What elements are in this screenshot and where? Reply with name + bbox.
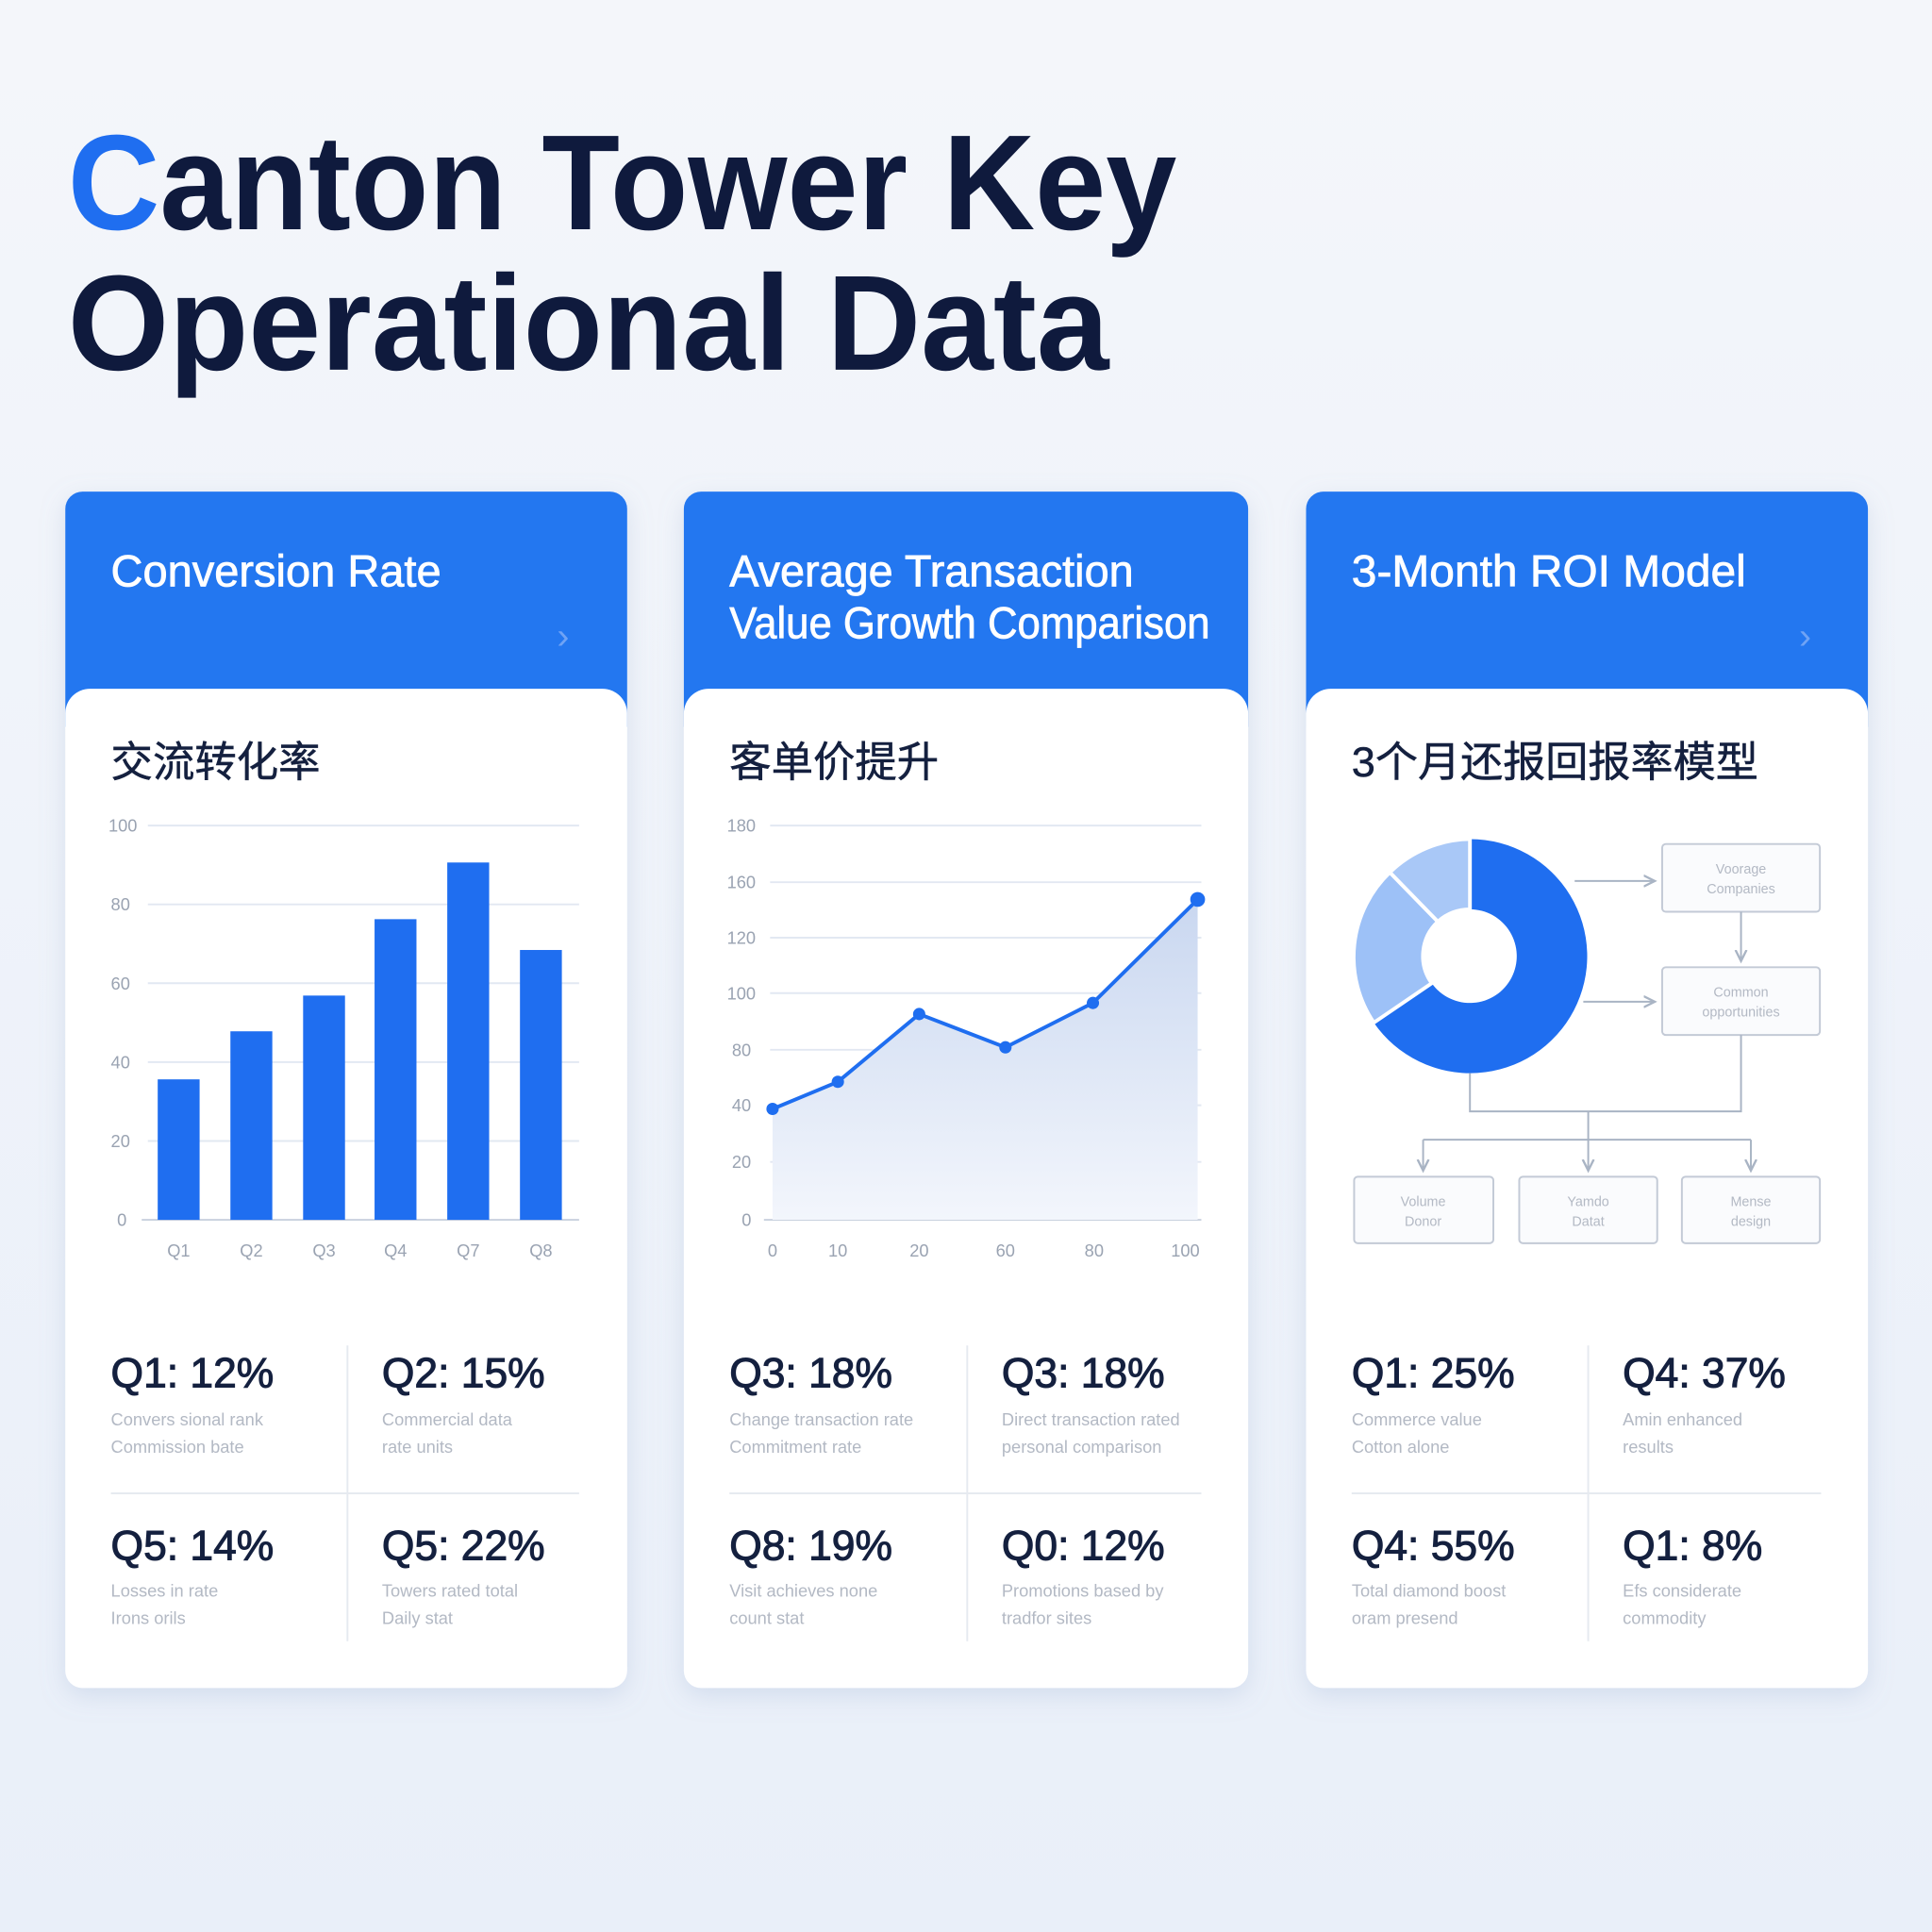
stats: ROI: Q4: 37% [1623,1351,1786,1397]
bar chart [108,816,579,1260]
header: conversion rate: › [557,616,569,657]
flow diagram: design [1731,1215,1771,1230]
stats: ROI [1352,1345,1821,1641]
line chart: 0 [768,1241,777,1260]
stats: ATV: Q8: 19% [729,1524,892,1570]
line chart: 80 [1085,1241,1104,1260]
stats: conversion: Q2: 15% [382,1351,545,1397]
bar chart: 80 [111,894,130,914]
flow diagram: Yamdo [1567,1195,1609,1210]
stats: ROI: Q1: 8% [1623,1524,1762,1570]
line chart [727,816,1205,1260]
line chart: 10 [828,1241,847,1260]
panel: ROI model [1306,491,1868,1688]
header: ROI: 3-Month ROI Model [1352,546,1746,596]
bar chart: Q4 [384,1241,407,1260]
bar chart: 100 [108,816,137,836]
stats: conversion: Losses in rate [111,1581,218,1601]
line chart: 120 [727,927,756,947]
line chart: 40 [732,1095,751,1115]
stats: ATV: Q0: 12% [1002,1524,1165,1570]
title: Canton Tower Key [68,108,1176,258]
bar chart: 0 [117,1210,126,1230]
title [68,108,1176,399]
stats: conversion: Commission bate [111,1437,244,1457]
stats: conversion: Irons orils [111,1607,186,1627]
title: Operational Data [68,248,1110,399]
stats: conversion: Q5: 14% [111,1524,274,1570]
stats: conversion: Q5: 22% [382,1524,545,1570]
stats: conversion: Q1: 12% [111,1351,274,1397]
flow diagram [1354,844,1820,1243]
stats: ROI: Commerce value [1352,1409,1482,1429]
stats: ROI: Total diamond boost [1352,1581,1506,1601]
line chart: 20 [909,1241,929,1260]
stats: conversion: Towers rated total [382,1581,518,1601]
flow diagram: Donor [1405,1215,1441,1230]
line chart: 100 [727,983,756,1003]
stats: ATV: Promotions based by [1002,1581,1164,1601]
bar chart: Q2 [240,1241,263,1260]
stats: ATV: Q3: 18% [729,1351,892,1397]
panel: conversion rate [65,491,627,1688]
stats: ATV: Change transaction rate [729,1409,913,1429]
flow diagram: Volume [1401,1195,1446,1210]
stats: ATV: count stat [729,1607,804,1627]
stats: ATV: Visit achieves none [729,1581,877,1601]
flow diagram: Common [1713,986,1769,1001]
line chart: 0 [741,1210,751,1230]
subtitle: 3个月还报回报率模型 [1352,740,1758,786]
stats: ATV [729,1345,1201,1641]
header: ROI: › [1799,616,1811,657]
bar chart: Q8 [529,1241,553,1260]
line chart: 80 [732,1040,751,1059]
stats: ROI: Q1: 25% [1352,1351,1515,1397]
flow diagram: Datat [1572,1215,1605,1230]
header: conversion rate: Conversion Rate [111,546,441,596]
subtitle: 客单价提升 [729,740,939,786]
stats: ROI: oram presend [1352,1607,1458,1627]
stats: conversion: Daily stat [382,1607,453,1627]
stats: ROI: Cotton alone [1352,1437,1449,1457]
line chart: 20 [732,1152,751,1172]
stats: conversion: rate units [382,1437,453,1457]
subtitle: 交流转化率 [111,740,321,786]
stats: conversion: Convers sional rank [111,1409,264,1429]
stats: ATV: Commitment rate [729,1437,861,1457]
header: ROI [1306,491,1868,727]
flow diagram: Companies [1707,882,1775,897]
header: ATV: Value Growth Comparison [729,598,1210,648]
line chart: 180 [727,816,756,836]
line chart: 60 [996,1241,1015,1260]
donut chart [1354,839,1587,1074]
stats: ATV: Q3: 18% [1002,1351,1165,1397]
header: conversion rate [65,491,627,727]
stats: ATV: tradfor sites [1002,1607,1091,1627]
bar chart: 40 [111,1052,130,1072]
stats: ATV: Direct transaction rated [1002,1409,1180,1429]
panel: average transaction value [684,491,1248,1688]
stats: conversion [111,1345,579,1641]
flow diagram: opportunities [1702,1006,1780,1021]
line chart: 100 [1171,1241,1200,1260]
stats: ROI: commodity [1623,1607,1707,1627]
header: ATV [684,491,1248,727]
stats: ROI: Q4: 55% [1352,1524,1515,1570]
bar chart: Q3 [312,1241,336,1260]
stats: ATV: personal comparison [1002,1437,1161,1457]
flow diagram: Mense [1730,1195,1772,1210]
stats: ROI: results [1623,1437,1674,1457]
bar chart: Q7 [457,1241,480,1260]
bar chart: 60 [111,974,130,993]
header: ATV: Average Transaction [729,546,1134,596]
stats: ROI: Efs considerate [1623,1581,1741,1601]
bar chart: Q1 [167,1241,191,1260]
stats: ROI: Amin enhanced [1623,1409,1742,1429]
flow diagram: Voorage [1716,862,1766,877]
bar chart: 20 [111,1131,130,1151]
line chart: 160 [727,873,756,892]
stats: conversion: Commercial data [382,1409,513,1429]
